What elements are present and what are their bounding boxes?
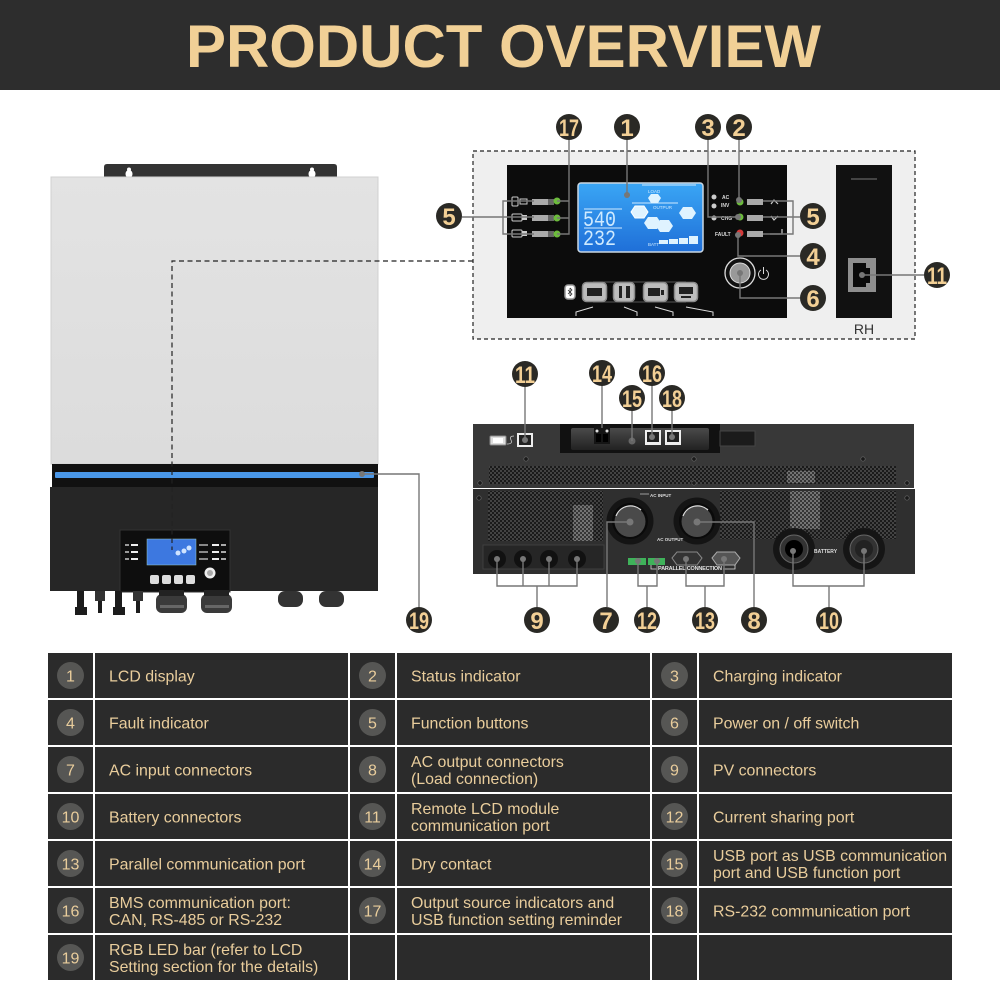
callout 8: 8 <box>747 608 761 635</box>
AC labels: AC OUTPUT <box>657 537 683 542</box>
callout 18: 18 <box>662 386 682 413</box>
row 3 item 7: 7 <box>66 762 75 780</box>
row 3 item 8 <box>350 747 650 792</box>
callout 5 right <box>763 201 826 234</box>
remote LCD port <box>490 433 533 447</box>
row 7 empty cells <box>350 935 952 980</box>
row 5 item 13: 13 <box>62 856 80 874</box>
row 3 item 8: 8 <box>368 762 377 780</box>
row 6 item 17: USB function setting reminder <box>411 912 623 929</box>
lower vents <box>488 471 896 541</box>
callout 17 <box>556 114 582 234</box>
callout 5 right: 5 <box>806 204 820 231</box>
callout 5 left: 5 <box>442 204 456 231</box>
dashed inset frame <box>473 151 915 339</box>
row 3 item 7: AC input connectors <box>109 762 252 780</box>
parallel connection label <box>651 565 735 572</box>
callout 4 <box>735 232 826 271</box>
row 5 item 14: Dry contact <box>411 856 492 874</box>
key link lines <box>593 282 686 302</box>
row 4 item 11: communication port <box>411 818 550 835</box>
row 1 item 3: Charging indicator <box>713 668 843 686</box>
callout 1 <box>614 114 640 198</box>
callout 11 side <box>859 262 950 290</box>
row 5 item 14: 14 <box>364 856 382 874</box>
callout 5 left <box>436 201 534 234</box>
callout 10 <box>790 548 867 635</box>
row 3 item 9: 9 <box>670 762 679 780</box>
row 1 item 2: 2 <box>368 668 377 686</box>
row 4 item 10 <box>48 794 348 839</box>
callout 14: 14 <box>592 361 612 388</box>
current sharing ports <box>628 558 665 565</box>
row 2 item 5 <box>350 700 650 745</box>
callout 11 side: 11 <box>927 263 947 290</box>
callout 6: 6 <box>806 286 820 313</box>
row 2 item 4: 4 <box>66 716 75 732</box>
parallel ports <box>672 552 740 565</box>
row 5 item 13 <box>48 841 348 886</box>
callout 16: 16 <box>642 361 662 388</box>
row 2 item 5: Function buttons <box>411 716 529 732</box>
row 6 item 16: CAN, RS-485 or RS-232 <box>109 912 282 929</box>
row 1 item 1 <box>48 653 348 698</box>
row 4 item 10: Battery connectors <box>109 810 242 826</box>
row 4 item 12: Current sharing port <box>713 810 855 826</box>
inverter rear view <box>473 360 915 635</box>
row 4 item 11 <box>350 794 650 839</box>
row 3 item 7 <box>48 747 348 792</box>
row 6 item 18 <box>652 888 952 933</box>
row 3 item 8: (Load connection) <box>411 771 538 788</box>
row 5 item 15 <box>652 841 952 886</box>
callout 2 <box>726 114 752 203</box>
right function keys and status indicators <box>712 194 782 238</box>
row 6 item 18: RS-232 communication port <box>713 904 911 920</box>
rear lower section <box>473 489 915 574</box>
parallel connection label: PARALLEL CONNECTION <box>658 566 722 572</box>
callout 11 rear: 11 <box>515 362 535 389</box>
LCD display <box>578 183 703 252</box>
callout 17: 17 <box>559 115 579 142</box>
row 3 item 9: PV connectors <box>713 762 816 780</box>
callout 1: 1 <box>620 115 634 142</box>
right function keys and status indicators: AC <box>722 195 730 201</box>
black control panel <box>507 165 787 318</box>
front control panel <box>120 530 230 592</box>
RH label: RH <box>854 321 874 337</box>
row 1 item 1: 1 <box>66 668 75 686</box>
row 6 item 16: BMS communication port: <box>109 895 291 912</box>
bottom key brackets <box>576 307 713 316</box>
leader and callout 19: 19 <box>409 608 429 635</box>
LCD display: 232 <box>583 227 616 252</box>
callout 9 <box>494 556 580 635</box>
right function keys and status indicators: CHG <box>721 216 732 222</box>
row 4 item 10: 10 <box>62 810 80 826</box>
front panel detail inset <box>436 114 950 339</box>
callout 4: 4 <box>806 244 820 271</box>
callout 11 rear <box>512 361 538 443</box>
upper vent <box>489 466 896 484</box>
LCD display: 540 <box>583 208 616 233</box>
row 1 item 2: Status indicator <box>411 668 521 686</box>
callout 9: 9 <box>530 608 544 635</box>
LCD display: LOAD <box>648 189 661 194</box>
AC output connector <box>674 498 720 544</box>
AC input connector <box>606 498 654 544</box>
communication module <box>560 424 755 453</box>
row 2 item 4: Fault indicator <box>109 716 210 732</box>
callout 3 <box>695 114 741 220</box>
row 5 item 15: USB port as USB communication <box>713 848 947 865</box>
row 6 item 16: 16 <box>62 904 80 920</box>
mounting bracket <box>104 164 337 178</box>
row 6 item 16 <box>48 888 348 933</box>
battery label: BATTERY <box>814 549 838 555</box>
RGB LED band <box>52 464 378 487</box>
cable glands <box>156 590 344 613</box>
row 2 item 6: Power on / off switch <box>713 716 859 732</box>
title: PRODUCT OVERVIEW <box>186 12 822 80</box>
legend table <box>48 653 952 980</box>
row 4 item 11: Remote LCD module <box>411 801 560 818</box>
chassis screws <box>477 457 909 500</box>
right function keys and status indicators: FAULT <box>715 232 731 238</box>
row 5 item 15: port and USB function port <box>713 865 901 882</box>
black lower body <box>50 487 378 591</box>
callout 18 <box>659 385 685 440</box>
callout 6 <box>737 270 826 313</box>
callout 16 <box>639 360 665 440</box>
dashed zoom leader <box>172 261 473 550</box>
PV connectors <box>75 591 143 615</box>
rear upper section <box>473 424 914 488</box>
row 6 item 17: 17 <box>364 904 382 920</box>
row 6 item 17 <box>350 888 650 933</box>
PV connector block <box>483 545 604 569</box>
callout 15: 15 <box>622 386 642 413</box>
row 4 item 12: 12 <box>666 810 684 826</box>
row 5 item 15: 15 <box>666 856 684 874</box>
callout 13 <box>683 556 727 635</box>
row 1 item 3: 3 <box>670 668 679 686</box>
callout 10: 10 <box>819 608 839 635</box>
callout 15 <box>619 385 645 441</box>
callout 7 <box>593 518 634 635</box>
row 2 item 6 <box>652 700 952 745</box>
bottom keys <box>565 282 698 302</box>
row 7 item 19: 19 <box>62 950 80 968</box>
row 2 item 6: 6 <box>670 716 679 732</box>
LCD display: OUTPUR <box>653 205 673 210</box>
row 3 item 8: AC output connectors <box>411 754 564 771</box>
right side module RH <box>836 165 892 337</box>
row 7 item 19: RGB LED bar (refer to LCD <box>109 942 302 959</box>
callout 12: 12 <box>637 608 657 635</box>
battery connectors <box>773 528 885 570</box>
row 6 item 18: 18 <box>666 904 684 920</box>
row 1 item 2 <box>350 653 650 698</box>
row 2 item 5: 5 <box>368 716 377 732</box>
row 5 item 13: Parallel communication port <box>109 856 306 874</box>
AC labels: AC INPUT <box>650 493 672 498</box>
LCD display: BATT <box>648 242 659 247</box>
callout 12 <box>634 558 660 635</box>
row 1 item 1: LCD display <box>109 668 195 686</box>
row 5 item 14 <box>350 841 650 886</box>
row 4 item 12 <box>652 794 952 839</box>
right function keys and status indicators: INV <box>721 203 730 209</box>
row 3 item 9 <box>652 747 952 792</box>
title banner <box>0 0 1000 90</box>
row 1 item 3 <box>652 653 952 698</box>
row 6 item 17: Output source indicators and <box>411 895 614 912</box>
callout 8 <box>694 518 767 635</box>
row 4 item 11: 11 <box>364 810 381 826</box>
callout 2: 2 <box>732 115 746 142</box>
row 2 item 4 <box>48 700 348 745</box>
inverter front view <box>50 164 378 615</box>
row 7 item 19 <box>48 935 348 980</box>
callout 7: 7 <box>599 608 613 635</box>
white upper body <box>51 177 378 464</box>
callout 14 <box>589 360 615 428</box>
AC labels <box>640 493 683 542</box>
left function keys and source indicators <box>512 197 560 238</box>
power switch <box>725 258 768 288</box>
callout 13: 13 <box>695 608 715 635</box>
row 7 item 19: Setting section for the details) <box>109 959 318 976</box>
leader and callout 19 <box>359 471 432 635</box>
callout 3: 3 <box>701 115 715 142</box>
